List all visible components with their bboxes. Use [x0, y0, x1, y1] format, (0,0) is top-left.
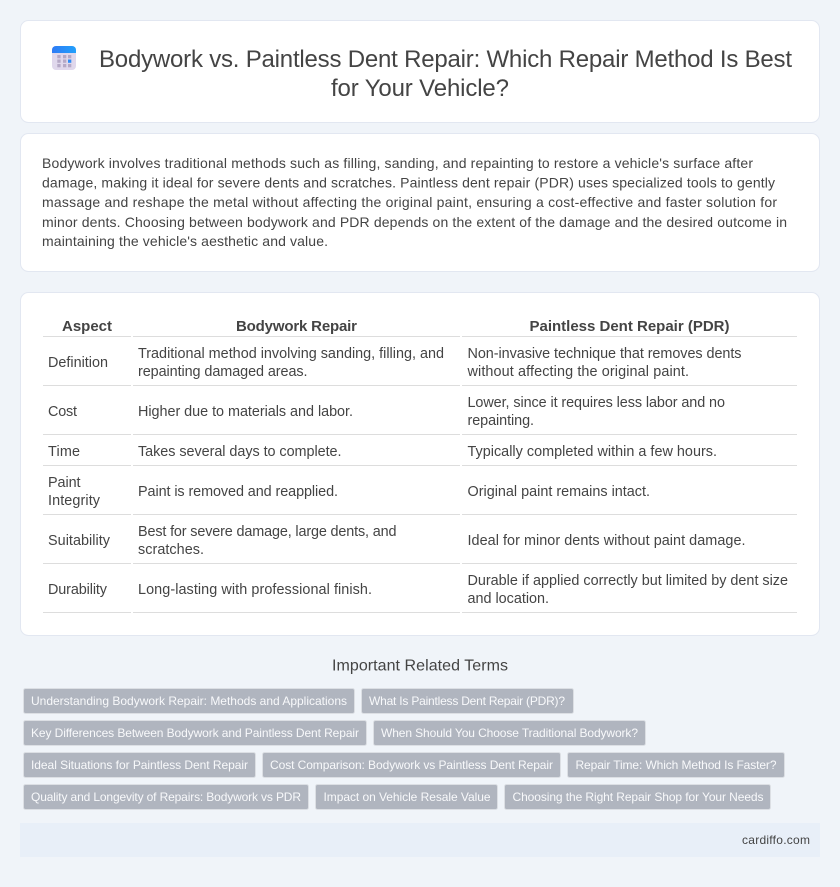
row: definition: Definition — [48, 355, 108, 371]
panel: header — [20, 20, 820, 122]
title: for Your Vehicle? — [331, 75, 509, 102]
row: cost: Lower, since it requires less labor and no — [468, 395, 725, 411]
row: suitability — [43, 524, 797, 564]
row: definition: without affecting the original paint. — [466, 364, 689, 380]
intro text block: minor dents. Choosing between bodywork and PDR depends on the extent of the damage and the desired outcome in — [42, 214, 787, 230]
row: cost: Higher due to materials and labor. — [138, 404, 353, 420]
tag — [24, 752, 256, 778]
tag — [504, 784, 770, 810]
tag: Repair Time: Which Method Is Faster? — [576, 758, 777, 772]
tag — [24, 720, 366, 746]
row: suitability: Ideal for minor dents without paint damage. — [468, 533, 746, 549]
title — [99, 46, 792, 102]
row: suitability: scratches. — [138, 542, 204, 558]
row: paint integrity: Integrity — [48, 493, 101, 509]
tag: Cost Comparison: Bodywork vs Paintless Dent Repair — [270, 758, 553, 772]
intro text block: massage and reshape the metal without affecting the original paint, ensuring a cost-effective and faster solution for — [42, 194, 777, 210]
panel: introduction — [20, 134, 820, 272]
table header row: Aspect — [62, 318, 112, 335]
panel: comparison table — [20, 292, 820, 636]
tag — [568, 752, 784, 778]
row: durability: Durability — [48, 582, 108, 598]
row: suitability: Best for severe damage, large dents, and — [138, 524, 396, 540]
row: time: Time — [48, 444, 80, 460]
intro text block: damage, making it ideal for severe dents and scratches. Paintless dent repair (PDR) uses specialized tools to gently — [42, 174, 775, 190]
tag list — [24, 688, 784, 810]
row: definition — [43, 346, 797, 386]
row: cost: Cost — [48, 404, 77, 420]
tag: Ideal Situations for Paintless Dent Repair — [31, 758, 248, 772]
row: suitability: Suitability — [48, 533, 111, 549]
row: definition: Traditional method involving sanding, filling, and — [138, 346, 444, 362]
row: durability: Durable if applied correctly but limited by dent size — [468, 573, 788, 589]
row: paint integrity: Paint is removed and reapplied. — [138, 484, 338, 500]
tag — [316, 784, 498, 810]
icon: calendar — [52, 46, 76, 70]
heading: important related terms: Important Related Terms — [332, 658, 508, 674]
row: paint integrity — [43, 475, 797, 515]
intro text block: maintaining the vehicle's aesthetic and value. — [42, 233, 328, 249]
table header row: Bodywork Repair — [236, 318, 357, 335]
row: durability — [43, 573, 797, 613]
row: paint integrity: Original paint remains intact. — [468, 484, 650, 500]
row: definition: Non-invasive technique that removes dents — [468, 346, 742, 362]
tag — [24, 784, 308, 810]
tag: Understanding Bodywork Repair: Methods and Applications — [31, 694, 347, 708]
tag: Quality and Longevity of Repairs: Bodywork vs PDR — [31, 790, 301, 804]
row: definition: repainting damaged areas. — [138, 364, 308, 380]
footer — [20, 823, 820, 857]
tag: Impact on Vehicle Resale Value — [324, 790, 491, 804]
row: time: Takes several days to complete. — [138, 444, 342, 460]
row: paint integrity: Paint — [48, 475, 80, 491]
tag: Choosing the Right Repair Shop for Your Needs — [512, 790, 764, 804]
intro text block: Bodywork involves traditional methods such as filling, sanding, and repainting to restore a vehicle's surface after — [42, 155, 753, 171]
row: cost — [43, 395, 797, 435]
footer: site name: cardiffo.com — [742, 833, 810, 847]
tag: What Is Paintless Dent Repair (PDR)? — [369, 694, 565, 708]
table header row — [43, 318, 797, 337]
tag — [374, 720, 646, 746]
row: time — [43, 444, 797, 466]
tag: Key Differences Between Bodywork and Paintless Dent Repair — [31, 726, 359, 740]
table header row: Paintless Dent Repair (PDR) — [530, 318, 730, 335]
intro text block — [42, 155, 787, 249]
row: durability: and location. — [468, 591, 549, 607]
row: time: Typically completed within a few hours. — [468, 444, 717, 460]
tag — [362, 688, 574, 714]
tag — [262, 752, 560, 778]
row: cost: repainting. — [468, 413, 534, 429]
tag — [24, 688, 354, 714]
tag: When Should You Choose Traditional Bodywork? — [381, 726, 638, 740]
row: durability: Long-lasting with professional finish. — [138, 582, 372, 598]
title: Bodywork vs. Paintless Dent Repair: Which Repair Method Is Best — [99, 46, 792, 73]
